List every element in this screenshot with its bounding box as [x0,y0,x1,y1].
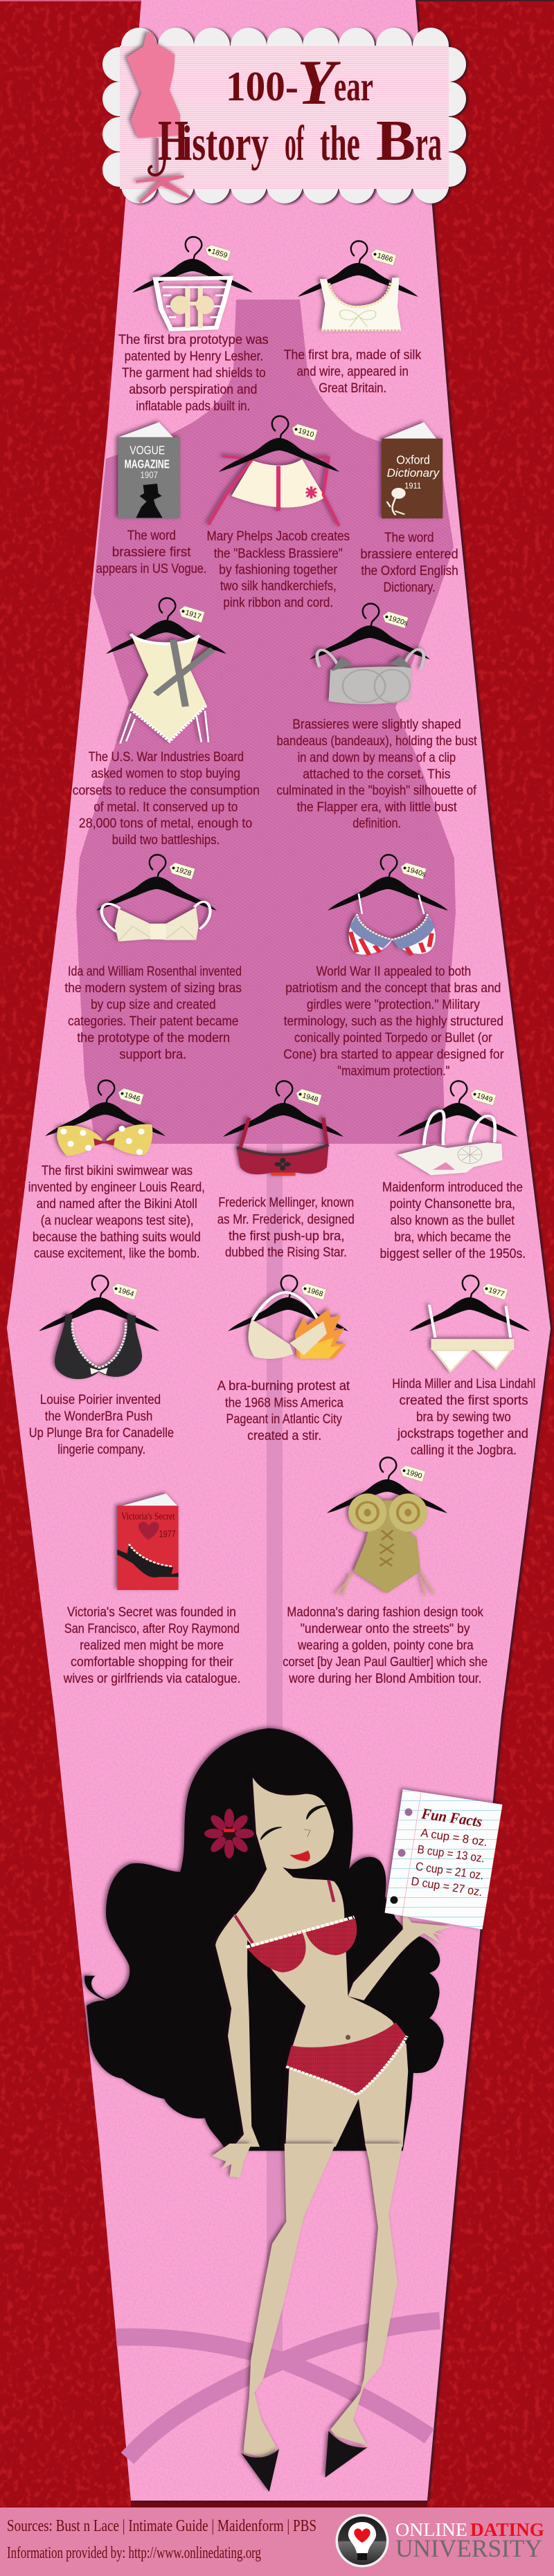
text: bra-burning: Pageant in Atlantic City [226,1412,342,1427]
title card [102,28,466,203]
text: Frederick Mellinger: as Mr. Frederick, designed [217,1212,355,1227]
text: Vogue [96,528,206,576]
text: Mary Phelps Jacob: Mary Phelps Jacob creates [206,529,350,544]
text: Frederick Mellinger: Frederick Mellinger, known [218,1195,354,1210]
title text: Y [297,47,341,118]
text: Maidenform: Maidenform introduced the [382,1180,523,1195]
title text: of [285,116,304,171]
text: Louise Poirier [29,1392,174,1457]
text: bandeaus: in and down by means of a clip [298,750,456,765]
text: Mary Phelps Jacob: the "Backless Brassiere" [214,546,343,561]
sources text: Sources: Bust n Lace | Intimate Guide | Maidenform | PBS [7,2517,316,2535]
sources text: Information provided by: http://www.onlinedating.org [7,2544,261,2562]
title text: ra [416,116,442,171]
icon: Vogue magazine book: 1907 [141,471,158,481]
hanger with tag 1964 [39,1275,159,1331]
hanger with tag 1946: 1946 [123,1090,141,1104]
entry: 1859 [118,237,269,414]
text: bra-burning: the 1968 Miss America [225,1395,343,1410]
icon: Victoria's Secret catalogue [117,1493,179,1590]
callout: fun facts note: C cup = 21 oz. [415,1860,485,1882]
hanger with tag 1910 [219,416,339,472]
text: Vogue: The word [127,528,176,543]
text: first bra prototype: The garment had shields to [122,365,266,381]
text: Maidenform: biggest seller of the 1950s. [379,1246,526,1261]
text: Rosenthal: support bra. [119,1047,186,1062]
garment: cup-sized bra [102,902,211,942]
callout: fun facts note: A cup = 8 oz. [420,1826,488,1849]
icon: Oxford Dictionary book [382,422,443,518]
text: bandeaus: Brassieres were slightly shaped [292,717,461,732]
icon: Vogue magazine book: VOGUE [129,444,165,457]
garment: patriotic bra [349,893,436,955]
text: bikini: because the bathing suits would [33,1230,201,1245]
entry: 1990 [283,1457,488,1686]
entry: 1964 [29,1275,174,1457]
garment: burning bra [249,1292,346,1359]
entry: 1977 Jogbra [392,1275,535,1458]
text: Hinda Miller: created the first sports [399,1393,528,1408]
text: Rosenthal [64,964,242,1062]
hanger with tag 1859: 1859 [211,247,229,260]
text: Frederick Mellinger [217,1195,355,1260]
text: bikini [28,1163,205,1261]
entry: Oxford 1911 [360,422,458,595]
entry: Victoria's Secret 1977 [63,1493,240,1686]
text: bikini: and named after the Bikini Atoll [37,1196,197,1212]
hanger with tag 1990 [327,1457,447,1513]
text: Maidenform [379,1180,526,1261]
entry: 1948 [217,1081,355,1260]
text: Hinda Miller: jockstraps together and [397,1426,528,1441]
garment: Rising Star push-up bra [237,1118,328,1176]
text: Victoria's Secret: realized men might be more [80,1638,224,1653]
text: War Industries Board [73,749,260,848]
text: War Industries Board: The U.S. War Industries Board [89,749,244,765]
footer [0,2507,554,2576]
entry: 1968 [217,1275,350,1443]
text: Oxford: The word [384,530,434,545]
logo: light bulb heart [335,2514,389,2567]
sources text [7,2517,316,2562]
hanger with tag 1917 [106,598,226,654]
scalloped white edge [102,28,466,203]
text: Hinda Miller [392,1376,535,1458]
text: Mary Phelps Jacob: pink ribbon and cord. [223,595,333,610]
text: War Industries Board: asked women to stop buying [91,766,240,781]
text: Madonna [283,1605,488,1686]
title text: ear [334,64,373,109]
garment: yellow bikini [57,1124,152,1156]
text: War Industries Board: 28,000 tons of metal, enough to [79,816,252,831]
text: first bra silk and wire [284,347,421,396]
hair [84,1728,444,2151]
callout: fun facts note [385,1789,503,1929]
hanger with tag 1948 [223,1081,343,1137]
text: Maidenform: also known as the bullet [391,1213,515,1228]
linen panel [120,46,449,189]
hanger with tag 1920s [310,603,430,659]
illustration: woman in red glitter bra [84,1728,503,2492]
text: Rosenthal: Ida and William Rosenthal invented [68,964,242,979]
entry: 1910 [206,416,350,610]
hanger with tag 1920s: 1920s [387,614,409,628]
title text: B [376,109,416,173]
text: Rosenthal: categories. Their patent became [68,1014,238,1029]
text: first bra silk and wire: Great Britain. [319,381,386,396]
text: Oxford: brassiere entered [360,547,458,562]
hanger with tag 1977 [409,1275,530,1331]
logo text: Online Dating University: ONLINE [395,2519,467,2540]
garment: Backless Brassiere [208,457,339,526]
face [261,1806,327,1861]
entry: 1917 [73,598,260,848]
text: War Industries Board: of metal. It conserved up to [93,800,238,815]
garment: silk and wire bra [320,277,401,331]
text: Louise Poirier: Up Plunge Bra for Canadelle [29,1425,174,1441]
text: Louise Poirier: lingerie company. [57,1442,145,1457]
hanger with tag 1859 [132,237,253,293]
text: World War II: "maximum protection." [337,1063,449,1079]
text: World War II: conically pointed Torpedo or Bullet (or [294,1030,492,1045]
entry: Vogue 1907 [96,422,206,576]
text: bra-burning: A bra-burning protest at [217,1378,350,1394]
text: Frederick Mellinger: dubbed the Rising Star. [225,1245,347,1260]
title text: 100- [226,64,298,109]
entry: 1920s [277,603,477,831]
icon: Oxford Dictionary book: 1911 [404,482,421,491]
text: Vogue: appears in US Vogue. [96,561,206,576]
hanger with tag 1910: 1910 [297,426,315,439]
text: Maidenform: bra, which became the [394,1230,511,1245]
hanger with tag 1940s [328,855,448,911]
icon: Victoria's Secret catalogue: Victoria's Secret [121,1510,175,1522]
logo text: Online Dating University [395,2519,544,2562]
title text: H [158,109,188,173]
text: World War II [283,964,504,1079]
text: World War II: Cone) bra started to appear designed for [283,1047,504,1062]
text: first bra prototype: inflatable pads built in. [136,399,250,414]
text: first bra prototype: The first bra prototype was [118,332,269,347]
garment: corset [120,634,213,744]
text: War Industries Board: corsets to reduce the consumption [73,783,260,798]
hanger with tag 1928 [96,855,217,911]
text: World War II: World War II appealed to both [316,964,471,979]
text: bandeaus: bandeaus (bandeaux), holding the bust [277,733,477,749]
callout: fun facts note: D cup = 27 oz. [410,1874,483,1899]
hanger with tag 1940s: 1940s [405,865,427,879]
hanger with tag 1977: 1977 [488,1286,506,1299]
text: bikini: cause excitement, like the bomb. [34,1245,199,1261]
entry: 1940s [283,855,504,1079]
hanger with tag 1949: 1949 [476,1091,494,1104]
garment: bandeau [317,650,424,704]
text: Mary Phelps Jacob: two silk handkerchiefs, [220,578,337,594]
body [215,1778,452,2147]
text: bandeaus: definition. [352,816,401,831]
text: World War II: terminology, such as the highly structured [284,1014,503,1029]
logo text: Online Dating University: UNIVERSITY [395,2534,542,2562]
hanger with tag 1990: 1990 [405,1468,423,1481]
hanger with tag 1968 [228,1275,348,1331]
text: bra-burning: created a stir. [247,1428,321,1443]
text: Vogue: brassiere first [112,545,191,560]
text: Frederick Mellinger: the first push-up bra, [229,1229,344,1244]
hanger with tag 1964: 1964 [117,1286,135,1299]
text: Oxford: Dictionary. [384,580,436,595]
text: Madonna: "underwear onto the streets" by [301,1621,470,1636]
text: Mary Phelps Jacob [206,529,350,610]
text: Rosenthal: by cup size and created [91,997,216,1012]
text: bikini: (a nuclear weapons test site), [41,1213,194,1228]
hanger with tag 1948: 1948 [301,1091,319,1104]
text: Victoria's Secret: comfortable shopping for their [71,1654,233,1670]
text: Louise Poirier: the WonderBra Push [45,1409,152,1424]
icon: Vogue magazine book: MAGAZINE [125,458,170,471]
icon: Vogue magazine book [118,422,180,518]
icon: pink mannequin [127,33,189,203]
text: first bra silk and wire: and wire, appeared in [297,364,409,379]
hanger with tag 1917: 1917 [184,608,202,621]
dress form silhouette [76,300,456,2458]
text: Victoria's Secret: wives or girlfriends via catalogue. [63,1671,240,1686]
entry: 1928 [64,855,242,1062]
shoes [241,2431,368,2492]
text: War Industries Board: build two battleships. [112,832,220,848]
hanger with tag 1866 [298,241,418,297]
text: bikini: The first bikini swimwear was [42,1163,193,1178]
lower legs and hand [212,2144,403,2458]
text: Victoria's Secret: San Francisco, after Roy Raymond [64,1621,240,1636]
hanger with tag 1949 [397,1081,518,1137]
text: Victoria's Secret [63,1605,240,1686]
title text: istory [182,116,269,171]
text: Madonna: Madonna's daring fashion design took [287,1605,483,1620]
text: Madonna: corset [by Jean Paul Gaultier] which she [283,1654,488,1670]
text: Victoria's Secret: Victoria's Secret was founded in [67,1605,236,1620]
text: bandeaus: the Flapper era, with little bust [297,800,457,815]
hanger with tag 1866: 1866 [376,251,394,264]
text: Hinda Miller: calling it the Jogbra. [411,1443,517,1458]
text: first bra prototype: patented by Henry Lesher. [125,349,263,364]
garment: Chansonette bullet bra [397,1111,503,1176]
text: Madonna: wearing a golden, pointy cone bra [297,1638,474,1653]
text: Rosenthal: the modern system of sizing bras [64,980,242,996]
callout: fun facts note: B cup = 13 oz. [416,1843,485,1865]
text: World War II: girdles were "protection." Military [307,997,480,1012]
garment: Madonna cone corset [336,1493,435,1596]
text: bandeaus: culminated in the "boyish" silhouette of [277,783,476,798]
icon: Oxford Dictionary book: Dictionary [387,467,440,480]
text: bra-burning [217,1378,350,1443]
entry: 1949 [379,1081,526,1261]
title text: the [320,116,360,171]
text: first bra prototype: absorb perspiration and [129,382,257,397]
callout: fun facts note: Fun Facts [420,1805,483,1830]
icon: Oxford Dictionary book: Oxford [396,454,430,467]
entry: 1946 [28,1080,205,1261]
title text [149,47,442,175]
hanger with tag 1928: 1928 [175,865,193,878]
icon: hair flower [204,1809,254,1858]
garment: WonderBra [55,1315,142,1379]
entry: 1866 [284,241,421,396]
text: Oxford: the Oxford English [361,563,458,578]
hanger with tag 1946 [45,1080,166,1136]
icon: Victoria's Secret catalogue: 1977 [159,1529,176,1540]
text: Madonna: wore during her Blond Ambition tour. [288,1671,481,1686]
text: Louise Poirier: Louise Poirier invented [40,1392,161,1407]
text: first bra silk and wire: The first bra, made of silk [284,347,421,363]
text: Rosenthal: the prototype of the modern [77,1030,230,1045]
text: bandeaus [277,717,477,831]
text: Maidenform: pointy Chansonette bra, [390,1196,515,1212]
hanger with tag 1968: 1968 [306,1286,324,1299]
garment: prototype bra [155,278,231,329]
garment: Jogbra [429,1305,514,1372]
text: World War II: patriotism and the concept that bras and [285,980,501,996]
bra and panties [235,1880,407,2094]
text: bandeaus: attached to the corset. This [303,767,451,782]
text: Oxford [360,530,458,595]
logo text: Online Dating University: DATING [470,2519,544,2540]
text: bikini: invented by engineer Louis Reard, [28,1180,205,1195]
text: Hinda Miller: bra by sewing two [416,1409,511,1425]
text: first bra prototype [118,332,269,414]
text: Mary Phelps Jacob: by fashioning together [219,562,338,577]
